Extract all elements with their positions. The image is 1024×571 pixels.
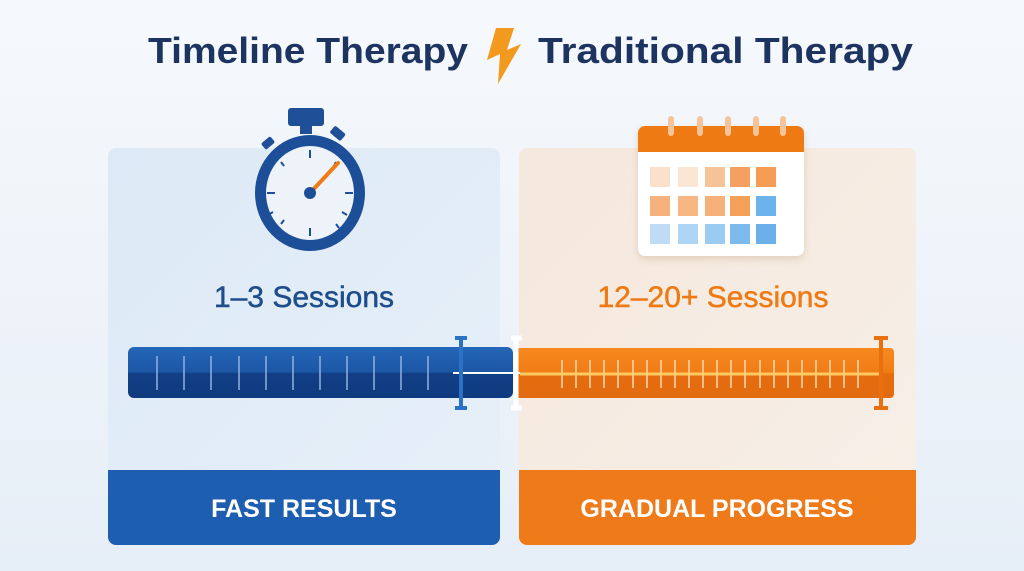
panel: timeline therapy	[108, 108, 500, 545]
icon: stopwatch	[255, 108, 365, 251]
label: 1-3 sessions: 1–3 Sessions	[214, 281, 394, 314]
icon: lightning	[487, 28, 521, 84]
footer: gradual progress	[519, 470, 916, 545]
title	[148, 28, 913, 84]
footer: fast results	[108, 470, 500, 545]
footer: gradual progress: GRADUAL PROGRESS	[580, 495, 854, 523]
label: 12-20+ sessions: 12–20+ Sessions	[597, 281, 829, 314]
panel: traditional therapy	[519, 116, 916, 545]
title: Traditional Therapy	[538, 30, 913, 71]
timeline bar	[128, 338, 894, 408]
title: Timeline Therapy	[148, 30, 468, 71]
icon: calendar	[638, 116, 804, 256]
footer: fast results: FAST RESULTS	[211, 495, 397, 523]
